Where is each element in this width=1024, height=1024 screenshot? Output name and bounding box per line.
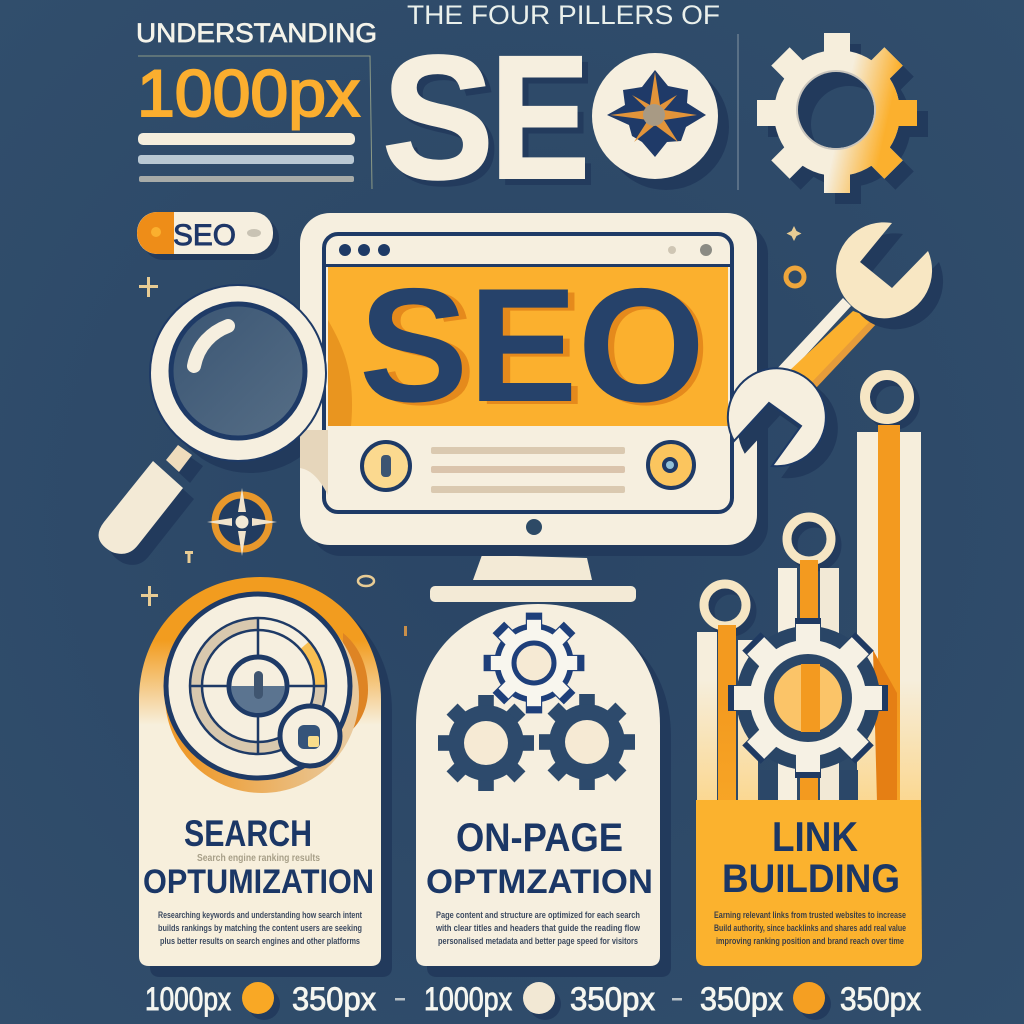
card heading: OPTUMIZATION [143,863,374,901]
monitor stand [430,555,636,602]
monitor [300,213,757,602]
orange dot [793,982,825,1014]
magnifier shadow [163,299,337,473]
swoosh below target [165,599,359,793]
heading: the four pillers of: THE FOUR PILLERS OF [407,0,720,30]
card heading: LINK [772,813,858,860]
screen panel [328,267,728,426]
footer size labels: 1000px [424,981,512,1017]
card body text: Page content and structure are optimized for each search [436,910,640,920]
dash [395,998,405,1000]
card body text: improving ranking position and brand reach over time [716,936,904,946]
ring [149,284,327,462]
card: on-page optimization [416,604,660,966]
cream dot [523,982,555,1014]
card body text [714,910,906,946]
wrench handle [773,298,880,388]
icon: lower left gear [438,695,534,791]
icon: crosshair [207,488,277,556]
card heading: Search engine ranking results [197,853,320,864]
card heading: SEARCH [184,813,312,854]
stat bars [138,133,355,182]
footer size labels: 350px [570,981,655,1017]
footer size labels: 350px [700,981,783,1017]
stat block: 1000px [137,56,372,189]
card body text: with clear titles and headers that guide the reading flow [435,923,641,933]
icon: small lock badge [280,706,340,766]
divider line [737,34,739,190]
icon: lower right gear [539,694,635,790]
card heading: ON-PAGE [456,816,623,860]
right button [648,442,694,488]
text lines [431,447,625,493]
card panel [696,800,922,966]
power dot [526,519,542,535]
icon: small ring [786,268,804,286]
screen heading: SEO [359,255,705,436]
orange dot [242,982,274,1014]
card: link building [696,375,922,966]
card heading [426,816,653,901]
main title: SEO [382,20,718,216]
heading: understanding: UNDERSTANDING [136,18,377,48]
upper head [836,222,932,318]
dash [672,998,682,1000]
monitor frame [300,213,757,545]
browser top bar [326,244,730,267]
handle [99,445,192,554]
card heading [143,813,374,901]
card body text: plus better results on search engines and other platforms [160,936,360,946]
card body text [158,910,362,946]
card body text [435,910,641,946]
icon: link gear [728,618,888,778]
icon: right chain link [857,375,921,802]
card body text: personalised metadata and better page speed for visitors [438,936,638,946]
footer size labels: 350px [292,981,376,1017]
main title: SEO: E [490,20,590,216]
footer size labels [145,981,921,1017]
tag: SEO pill [137,212,273,254]
icon: compass in letter O [592,53,718,179]
card body text: Researching keywords and understanding how search intent [158,910,362,920]
icon: wrench [728,222,932,466]
icon: large gear [757,33,917,193]
sparkles [139,226,802,636]
screen heading: SEO [368,258,710,439]
main title: SEO: S [382,20,494,216]
footer size labels: 1000px [145,981,231,1017]
icon: upper gear [484,613,584,713]
card body text: builds rankings by matching the content users are seeking [158,923,362,933]
tag: SEO pill: SEO [173,219,236,252]
card body text: Build authority, since backlinks and shares add real value [714,923,906,933]
left button [362,442,410,490]
footer size labels: 350px [840,981,921,1017]
icon: left chain link [697,584,758,802]
lower head [728,368,826,466]
icon: magnifying glass [99,284,327,554]
card heading [722,813,900,901]
card heading: BUILDING [722,857,900,901]
icon: radar target [166,594,350,778]
icon: middle chain link [760,517,858,802]
card: search optimization [139,577,381,966]
stat number: 1000px [137,56,360,130]
card heading: OPTMZATION [426,863,653,901]
card body text: Earning relevant links from trusted websites to increase [714,910,906,920]
